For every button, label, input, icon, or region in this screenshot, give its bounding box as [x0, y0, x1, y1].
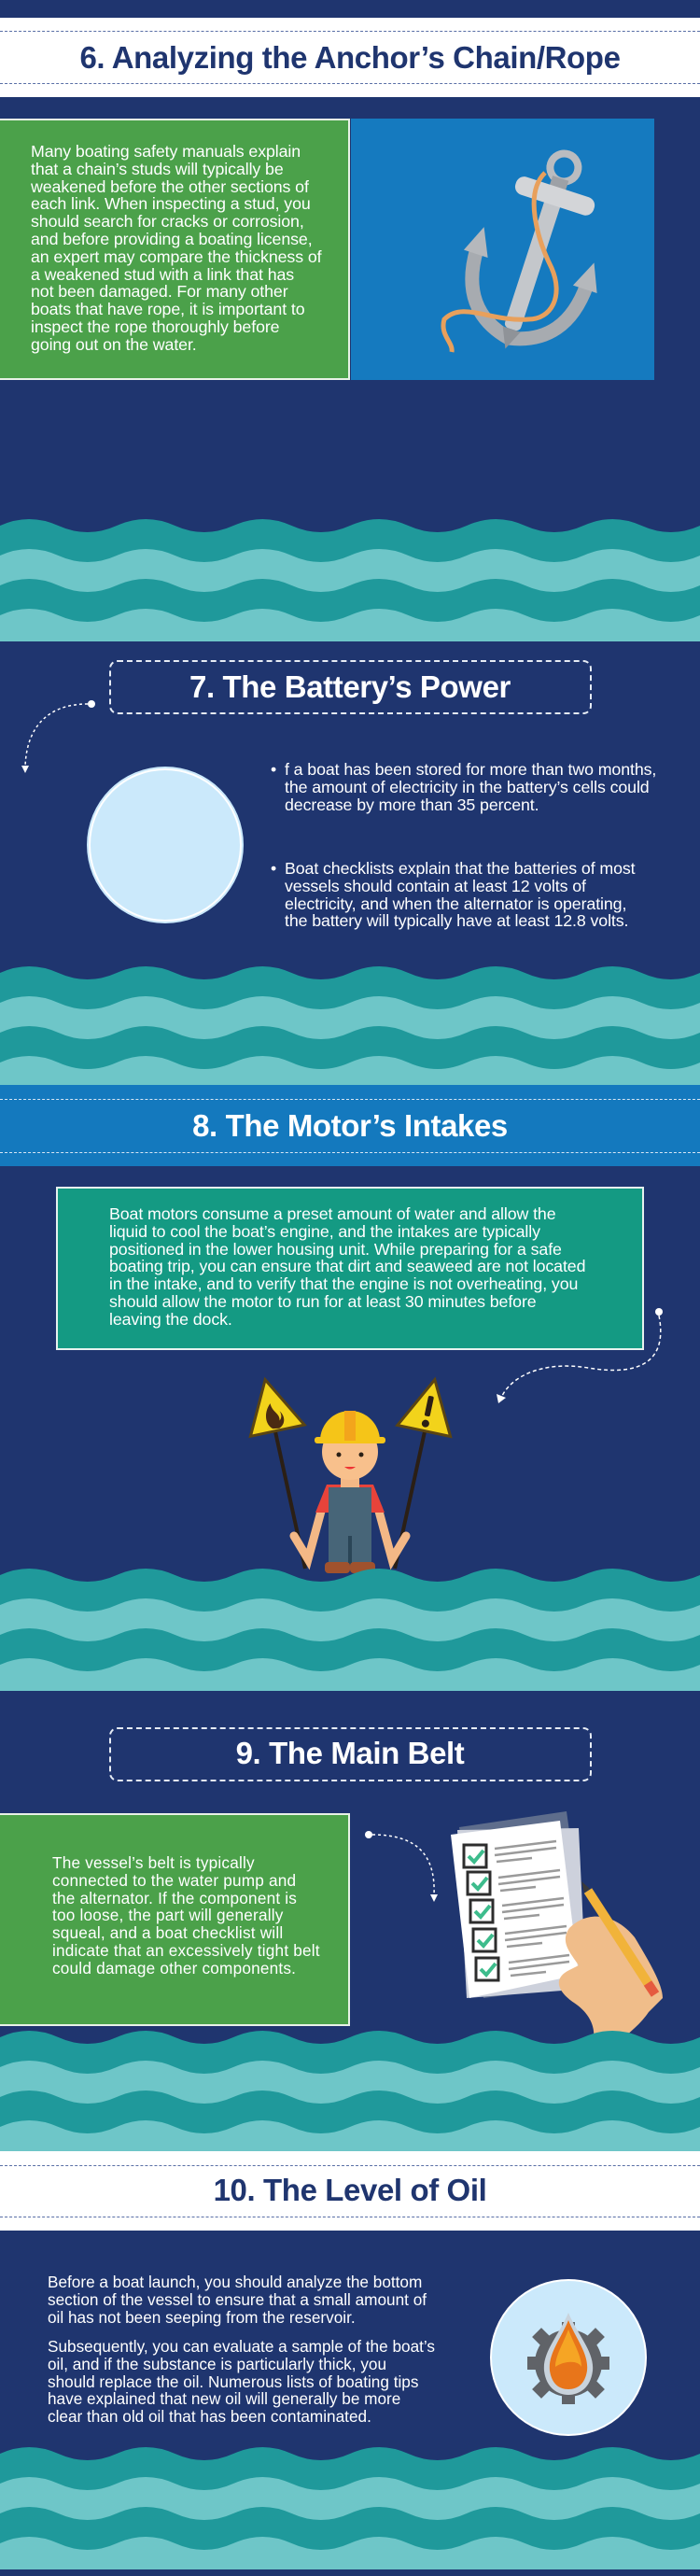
- text block: anchor chain: going out on the water.: [31, 335, 197, 354]
- text block: battery bullets: the amount of electricity in the battery’s cells could: [285, 778, 650, 796]
- panel: anchor image blue box: [351, 119, 654, 380]
- text block: motor intakes: Boat motors consume a preset amount of water and allow the: [109, 1204, 556, 1223]
- text block: battery bullets: vessels should contain at least 12 volts of: [285, 877, 586, 895]
- section 8 title band: [0, 1085, 700, 1166]
- icon: oil drop gear circle: [490, 2279, 647, 2436]
- text block: oil level: Before a boat launch, you should analyze the bottom: [48, 2273, 422, 2291]
- text block: main belt: connected to the water pump and: [52, 1871, 296, 1890]
- text block: anchor chain: [31, 142, 322, 354]
- text block: anchor chain: inspect the rope thoroughly before: [31, 317, 279, 336]
- text block: oil sample: have explained that new oil will generally be more: [48, 2389, 400, 2408]
- text block: motor intakes: should allow the motor to run for at least 30 minutes before: [109, 1292, 537, 1311]
- panel: motor text box: [56, 1187, 644, 1350]
- text block: oil level: oil has not been seeping from the reservoir.: [48, 2308, 356, 2327]
- waves 1: [0, 519, 700, 641]
- section 6 title band: [0, 18, 700, 97]
- text block: anchor chain: boats that have rope, it is important to: [31, 300, 305, 318]
- text block: main belt: squeal, and a boat checklist will: [52, 1923, 283, 1942]
- text block: motor intakes: liquid to cool the boat’s engine, and the intakes are typically: [109, 1222, 540, 1241]
- title: 10. The Level of Oil: 10. The Level of Oil: [214, 2173, 486, 2207]
- text block: anchor chain: should search for cracks or corrosion,: [31, 212, 304, 231]
- text block: main belt: indicate that an excessively tight belt: [52, 1941, 320, 1960]
- waves 2: [0, 966, 700, 1085]
- text block: main belt: the alternator. If the component is: [52, 1889, 297, 1907]
- text block: motor intakes: leaving the dock.: [109, 1310, 232, 1329]
- text block: battery bullets: •: [271, 760, 276, 779]
- text block: battery bullets: decrease by more than 35 percent.: [285, 795, 539, 814]
- arrow: dotted curve to circle: [21, 700, 95, 773]
- text block: main belt: [52, 1853, 320, 1978]
- text block: oil sample: oil, and if the substance is particularly thick, you: [48, 2355, 386, 2373]
- title: 9. The Main Belt: 9. The Main Belt: [236, 1736, 464, 1770]
- text block: anchor chain: a weakened stud with a link that has: [31, 265, 294, 284]
- waves 5: [0, 2447, 700, 2569]
- heading box: 7: [109, 660, 592, 714]
- icon: battery circle: [89, 768, 242, 922]
- panel: belt text green box: [0, 1813, 350, 2026]
- text block: battery bullets: •: [271, 859, 276, 878]
- arrow: dotted curve to checklist: [365, 1831, 438, 1902]
- title: 6. Analyzing the Anchor's Chain/Rope: 6. Analyzing the Anchor’s Chain/Rope: [79, 40, 621, 75]
- text block: motor intakes: boating trip, you can ensure that dirt and seaweed are not located: [109, 1257, 585, 1275]
- panel: anchor text green box: [0, 119, 350, 380]
- text block: battery bullets: [271, 760, 656, 930]
- title: 7. The Battery's Power: 7. The Battery’s Power: [189, 669, 511, 704]
- icon: checklist with hand and pencil: [451, 1811, 663, 2034]
- icon: anchor: [441, 149, 597, 353]
- text block: main belt: too loose, the part will generally: [52, 1906, 284, 1924]
- text block: main belt: The vessel’s belt is typically: [52, 1853, 255, 1872]
- text block: oil sample: Subsequently, you can evaluate a sample of the boat’s: [48, 2337, 435, 2356]
- text block: main belt: could damage other components.: [52, 1959, 296, 1978]
- text block: anchor chain: weakened before the other sections of: [31, 177, 309, 196]
- text block: anchor chain: each link. When inspecting a stud, you: [31, 194, 311, 213]
- waves 4: [0, 2031, 700, 2151]
- arrow: dotted curve to worker: [497, 1308, 663, 1403]
- text block: oil sample: clear than old oil that has been contaminated.: [48, 2407, 371, 2426]
- text block: battery bullets: electricity, and when the alternator is operating,: [285, 894, 626, 913]
- heading box: 9: [109, 1727, 592, 1781]
- icon: worker with warning signs: [248, 1376, 453, 1573]
- text block: anchor chain: an expert may compare the thickness of: [31, 247, 321, 266]
- text block: motor intakes: [109, 1204, 585, 1329]
- text block: battery bullets: the battery will typically have at least 12.8 volts.: [285, 911, 628, 930]
- text block: anchor chain: Many boating safety manuals explain: [31, 142, 301, 161]
- text block: oil level: section of the vessel to ensure that a small amount of: [48, 2290, 427, 2309]
- text block: battery bullets: Boat checklists explain that the batteries of most: [285, 859, 636, 878]
- text block: oil sample: [48, 2337, 435, 2426]
- text block: battery bullets: f a boat has been stored for more than two months,: [285, 760, 656, 779]
- text block: oil sample: should replace the oil. Numerous lists of boating tips: [48, 2372, 418, 2391]
- text block: anchor chain: and before providing a boating license,: [31, 230, 313, 248]
- text block: oil level: [48, 2273, 427, 2327]
- title: 8. The Motor's Intakes: 8. The Motor’s Intakes: [192, 1108, 508, 1143]
- section 10 title band: [0, 2151, 700, 2231]
- text block: anchor chain: not been damaged. For many other: [31, 282, 288, 301]
- waves 3: [0, 1569, 700, 1691]
- text block: anchor chain: that a chain’s studs will typically be: [31, 160, 284, 178]
- text block: motor intakes: in the intake, and to verify that the engine is not overheating, you: [109, 1274, 578, 1293]
- text block: motor intakes: positioned in the lower housing unit. While preparing for a safe: [109, 1240, 562, 1259]
